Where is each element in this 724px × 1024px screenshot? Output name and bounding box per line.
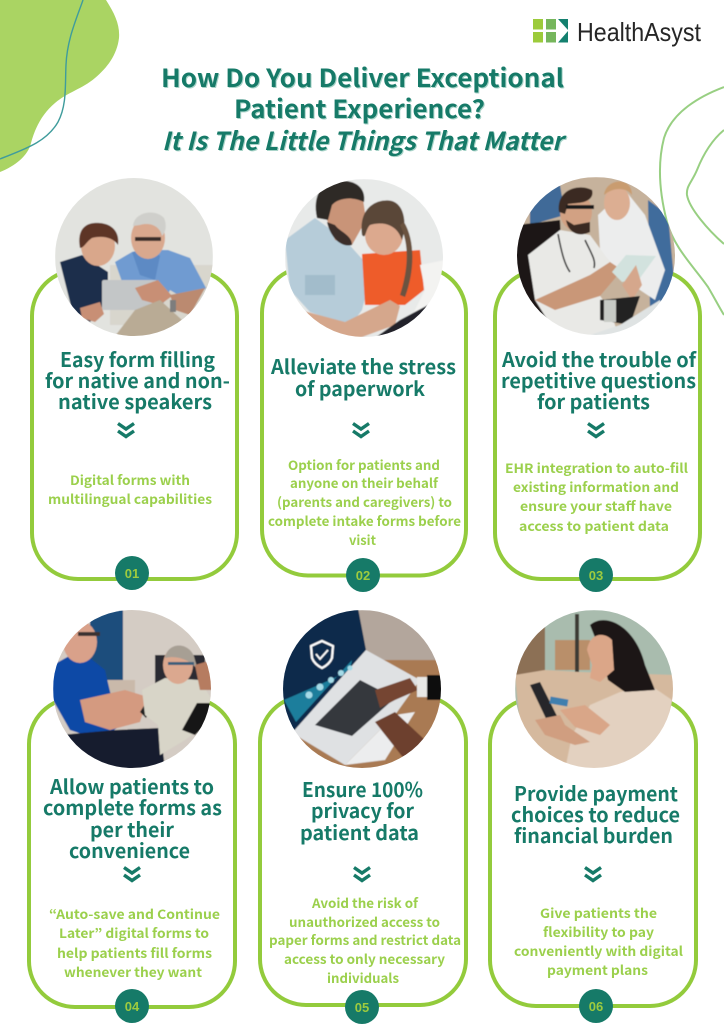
number badge 03 (579, 558, 613, 592)
heading: of paperwork (295, 373, 425, 402)
heading: for native and non- (45, 365, 230, 394)
text block (269, 893, 461, 987)
text block: flexibility to pay (543, 922, 655, 941)
logo: HealthAsyst: HealthAsyst (577, 17, 702, 47)
photo: laptop with security shield (280, 608, 445, 770)
text block: help patients fill forms (57, 943, 212, 962)
text block: existing information and (513, 477, 679, 496)
icon: double chevron (124, 868, 140, 880)
photo: older couple with tablet (55, 177, 215, 340)
text block: anyone on their behalf (290, 473, 439, 492)
decorative green blob top left (0, 0, 119, 172)
number badge 02 (346, 558, 380, 592)
number badge 06 (579, 989, 613, 1023)
heading: native speakers (58, 386, 212, 415)
heading (270, 351, 456, 402)
heading (45, 344, 230, 415)
heading: Alleviate the stress (270, 351, 456, 380)
text block: Option for patients and (288, 455, 440, 474)
text block: paper forms and restrict data (269, 930, 461, 949)
title: Patient Experience? (234, 90, 485, 126)
panel: card 01 easy form filling (32, 177, 237, 590)
text block: payment plans (547, 960, 648, 979)
text block (268, 455, 461, 549)
heading (300, 774, 423, 846)
text block (48, 470, 212, 508)
heading: Ensure 100% (302, 774, 423, 803)
panel: card 06 payment choices (490, 610, 696, 1023)
number badge 05 (345, 990, 379, 1024)
text block: EHR integration to auto-fill (505, 458, 688, 477)
text block: Later” digital forms to (59, 923, 209, 942)
icon: double chevron (118, 424, 134, 436)
text block: conveniently with digital (514, 941, 683, 960)
heading (501, 344, 698, 415)
icon: double chevron (588, 424, 604, 436)
icon: double chevron (585, 868, 601, 880)
number badge 01 (115, 556, 149, 590)
title: How Do You Deliver Exceptional (161, 59, 564, 95)
heading: choices to reduce (511, 799, 680, 828)
text block: complete intake forms before (268, 511, 461, 530)
photo: older couple on phones (53, 609, 213, 770)
photo: woman paying by phone (515, 610, 675, 770)
panel: card 04 complete at convenience (29, 609, 235, 1023)
heading: privacy for (311, 795, 414, 824)
number badge 04: 04 (125, 999, 140, 1014)
photo: doctors with tablet (516, 177, 676, 340)
icon: double chevron (353, 424, 369, 436)
text block (505, 458, 688, 535)
text block (49, 904, 220, 981)
text block: unauthorized access to (289, 912, 440, 931)
text block: whenever they want (64, 962, 203, 981)
heading (43, 771, 222, 864)
heading: Allow patients to (49, 771, 214, 800)
heading: financial burden (514, 820, 673, 849)
text block: “Auto-save and Continue (49, 904, 220, 923)
heading: convenience (69, 835, 190, 864)
heading: patient data (300, 817, 419, 846)
text block: Digital forms with (70, 470, 190, 489)
text block: Avoid the risk of (311, 893, 419, 912)
number badge 06: 06 (589, 999, 603, 1014)
logo: HealthAsyst (533, 17, 702, 47)
text block: (parents and caregivers) to (277, 492, 452, 511)
text block: individuals (327, 968, 399, 987)
heading: complete forms as (43, 792, 222, 821)
heading: Provide payment (514, 778, 679, 807)
panel: card 03 repetitive questions (495, 177, 700, 592)
heading (511, 778, 680, 849)
photo: father and daughter (285, 179, 445, 345)
icon: double chevron (354, 868, 370, 880)
decorative green curves right (660, 87, 724, 315)
heading: for patients (537, 386, 650, 415)
decorative teal curve top left (0, 0, 83, 159)
panel: card 05 privacy (260, 608, 466, 1024)
heading: Easy form filling (60, 344, 215, 373)
text block (514, 903, 683, 979)
text block: ensure your staff have (520, 496, 672, 515)
title: It Is The Little Things That Matter (162, 122, 567, 158)
heading: repetitive questions (501, 365, 696, 394)
number badge 05: 05 (355, 1000, 369, 1015)
text block: multilingual capabilities (48, 489, 212, 508)
number badge 02: 02 (356, 568, 370, 583)
number badge 01: 01 (125, 566, 139, 581)
text block: access to patient data (519, 516, 669, 535)
number badge 04 (115, 989, 149, 1023)
title (161, 59, 567, 158)
panel: card 02 alleviate stress (262, 179, 466, 592)
text block: Give patients the (540, 903, 657, 922)
number badge 03: 03 (589, 568, 603, 583)
heading: per their (90, 814, 174, 843)
text block: access to only necessary (284, 949, 446, 968)
heading: Avoid the trouble of (501, 344, 698, 373)
text block: visit (349, 530, 377, 549)
